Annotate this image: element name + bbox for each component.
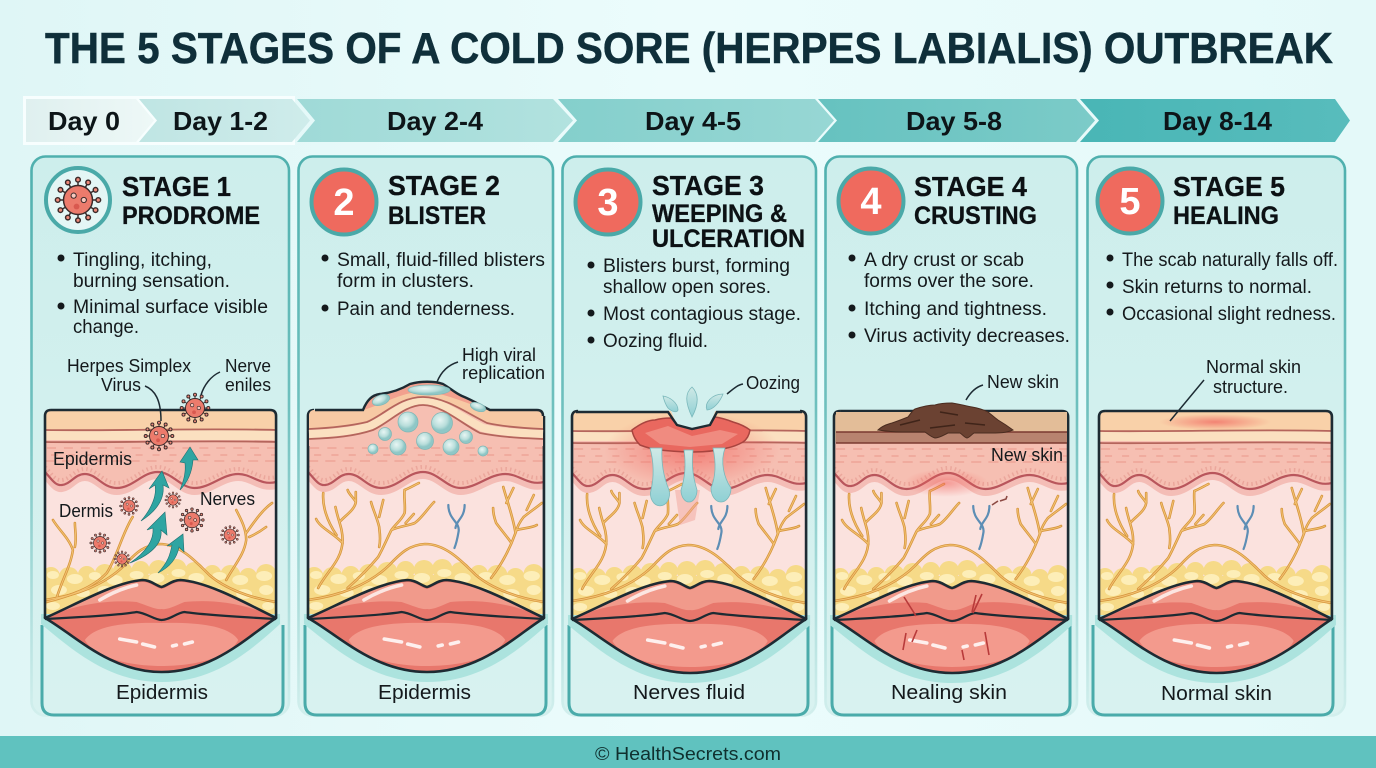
timeline step: Day 1-2: Day 1-2 <box>173 106 268 136</box>
callout: herpes simplex virus: Herpes Simplex <box>67 356 191 376</box>
symptom list: Tingling, itching, <box>73 250 212 271</box>
icon: number 3 <box>576 170 640 234</box>
symptom list: Small, fluid-filled blisters <box>337 250 545 271</box>
symptom list <box>322 250 545 320</box>
timeline step: Day 0 <box>26 99 154 142</box>
heading: stage 2: STAGE 2 <box>388 170 500 201</box>
ulcer and inflammation <box>576 409 802 525</box>
icon: virus badge <box>46 168 110 232</box>
symptom list: Skin returns to normal. <box>1122 277 1312 298</box>
icon: number 4: 4 <box>860 181 882 223</box>
footer <box>0 736 1376 768</box>
symptom list: change. <box>73 317 139 338</box>
callout: normal skin structure <box>1170 357 1301 421</box>
symptom list <box>848 250 1070 347</box>
callout: high viral replication <box>437 345 545 383</box>
oozing drips <box>650 387 731 506</box>
callout: new skin: New skin <box>987 372 1059 392</box>
symptom list: Blisters burst, forming <box>603 256 790 277</box>
slight redness <box>1159 414 1271 430</box>
symptom list: forms over the sore. <box>864 271 1034 292</box>
skin cross-section: stage 5 <box>1095 411 1336 683</box>
heading: stage 4: STAGE 4 <box>914 171 1027 202</box>
callout: nerve endings: eniles <box>225 375 271 395</box>
symptom list: Virus activity decreases. <box>864 326 1070 347</box>
symptom list: Minimal surface visible <box>73 297 268 318</box>
skin cross-section: stage 4 <box>830 403 1072 683</box>
timeline step: Day 8-14 <box>1080 99 1350 142</box>
viruses in tissue <box>90 393 239 567</box>
symptom list: Occasional slight redness. <box>1122 304 1336 325</box>
skin label: new skin: New skin <box>991 445 1063 465</box>
footer: © HealthSecrets.com <box>595 744 781 764</box>
symptom list: The scab naturally falls off. <box>1122 250 1338 271</box>
heading: stage 3: WEEPING & <box>652 200 787 228</box>
symptom list: shallow open sores. <box>603 277 771 298</box>
timeline step: Day 4-5: Day 4-5 <box>645 106 741 136</box>
lip cracks <box>903 594 989 660</box>
symptom list: Most contagious stage. <box>603 304 801 325</box>
callout: herpes simplex virus <box>67 356 191 421</box>
heading: stage 1: STAGE 1 <box>122 171 231 202</box>
timeline step: Day 2-4: Day 2-4 <box>387 106 484 136</box>
bottom caption: Nealing skin <box>891 682 1007 704</box>
skin cross-section: stage 1 <box>41 393 280 682</box>
panel: stage 1 prodrome <box>32 156 289 716</box>
timeline step: Day 1-2 <box>139 99 310 142</box>
bottom caption: Epidermis <box>116 682 208 704</box>
heading: stage 3: STAGE 3 <box>652 170 764 201</box>
symptom list: Oozing fluid. <box>603 331 708 352</box>
callout: nerve endings <box>201 356 271 395</box>
skin cross-section: stage 3 <box>568 387 810 683</box>
symptom list: A dry crust or scab <box>864 250 1024 271</box>
scab and new skin <box>836 403 1067 505</box>
timeline step: Day 5-8 <box>818 99 1095 142</box>
timeline step: Day 2-4 <box>297 99 573 142</box>
blister dome <box>309 382 543 446</box>
heading: stage 1: PRODROME <box>122 202 260 230</box>
callout: oozing: Oozing <box>746 373 800 393</box>
icon: number 2 <box>312 170 376 234</box>
skin labels: Epidermis <box>53 449 132 469</box>
heading: stage 2 <box>388 170 500 230</box>
symptom list: Pain and tenderness. <box>337 299 515 320</box>
heading: stage 5: STAGE 5 <box>1173 171 1285 202</box>
timeline step: Day 0: Day 0 <box>48 106 120 136</box>
heading: stage 4: CRUSTING <box>914 202 1037 230</box>
symptom list <box>58 250 268 338</box>
panel: stage 2 blister <box>298 156 553 716</box>
skin labels <box>53 449 255 521</box>
bottom caption: Nerves fluid <box>633 682 745 704</box>
callout: high viral replication: High viral <box>462 345 536 365</box>
skin labels: Nerves <box>200 489 255 509</box>
heading: stage 3: ULCERATION <box>652 225 805 253</box>
timeline step: Day 4-5 <box>558 99 834 142</box>
panel: stage 4 crusting <box>826 156 1077 716</box>
timeline step: Day 8-14: Day 8-14 <box>1163 106 1273 136</box>
skin cross-section: stage 2 <box>304 382 548 682</box>
heading: stage 1 <box>122 171 260 230</box>
callout: nerve endings: Nerve <box>225 356 271 376</box>
symptom list <box>588 256 801 352</box>
heading: stage 2: BLISTER <box>388 202 486 230</box>
callout: new skin <box>966 372 1059 400</box>
timeline <box>23 96 1350 145</box>
callout: normal skin structure: Normal skin <box>1206 357 1301 377</box>
bottom caption: Epidermis <box>378 682 471 704</box>
panel: stage 3 weeping and ulceration <box>562 156 816 716</box>
callout: oozing <box>727 373 800 394</box>
bottom caption: Normal skin <box>1161 683 1272 705</box>
icon: number 5: 5 <box>1119 181 1141 223</box>
heading: stage 3 <box>652 170 805 253</box>
skin labels: Dermis <box>59 501 113 521</box>
callout: herpes simplex virus: Virus <box>101 375 141 395</box>
icon: number 4 <box>838 168 904 234</box>
callout: high viral replication: replication <box>462 363 545 383</box>
heading: stage 5: HEALING <box>1173 202 1279 230</box>
icon: number 3: 3 <box>597 182 619 224</box>
panel: stage 5 healing <box>1088 156 1345 716</box>
arrows: virus travelling upward <box>130 447 198 573</box>
icon: number 2: 2 <box>333 182 355 224</box>
callout: normal skin structure: structure. <box>1213 377 1288 397</box>
symptom list: burning sensation. <box>73 271 230 292</box>
symptom list <box>1106 250 1338 325</box>
heading: stage 5 <box>1173 171 1285 230</box>
fluid blisters <box>368 385 488 456</box>
timeline step: Day 5-8: Day 5-8 <box>906 106 1002 136</box>
symptom list: Itching and tightness. <box>864 299 1047 320</box>
heading: stage 4 <box>914 171 1037 230</box>
icon: number 5 <box>1098 168 1162 234</box>
symptom list: form in clusters. <box>337 271 474 292</box>
